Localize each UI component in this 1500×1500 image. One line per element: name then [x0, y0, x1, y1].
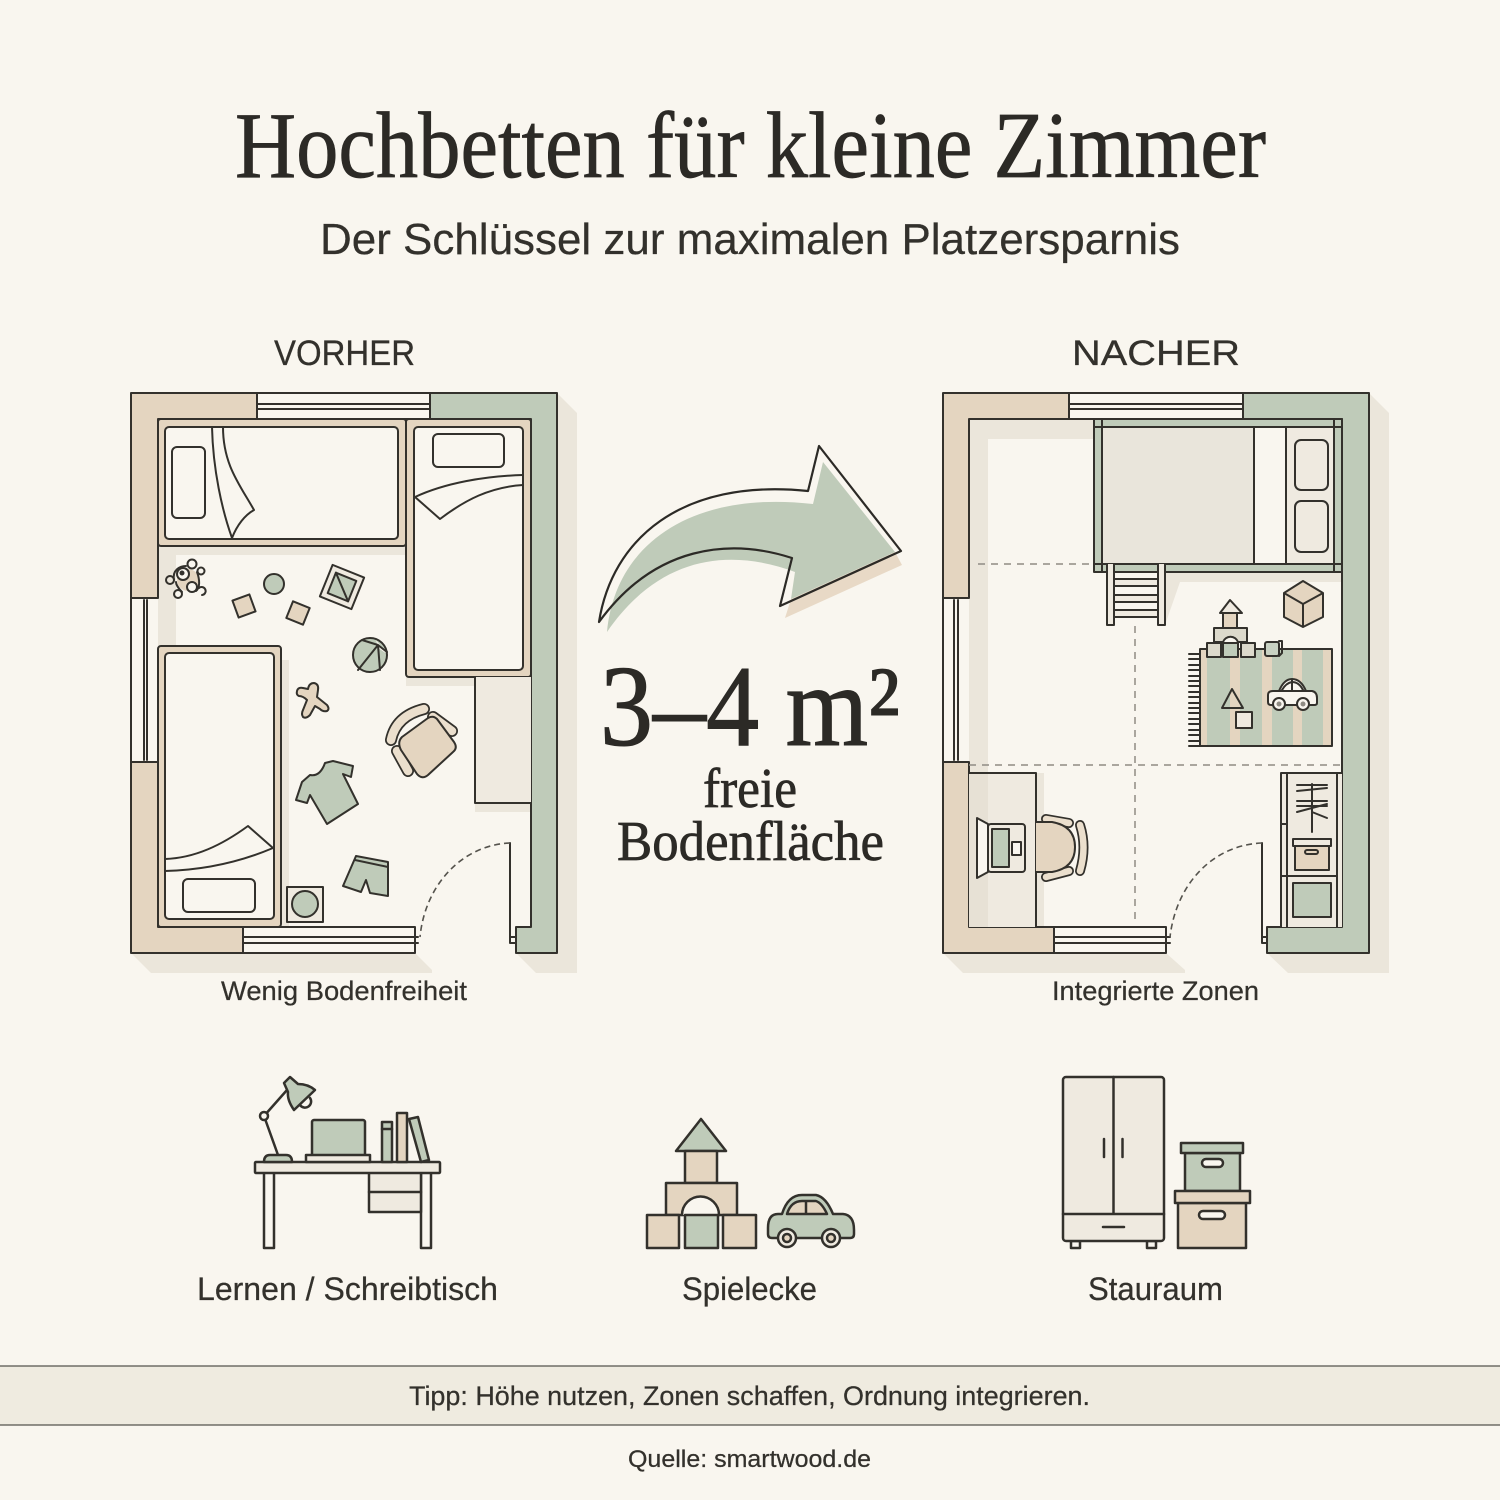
door [420, 843, 516, 943]
label: storage: Stauraum [1088, 1271, 1223, 1307]
icon: wardrobe and boxes [1063, 1077, 1250, 1248]
clothing: shorts [343, 856, 388, 896]
label: study: Lernen / Schreibtisch [197, 1271, 498, 1307]
toy: teddy [297, 683, 328, 718]
text: free floor space: Bodenfläche [617, 811, 884, 873]
heading: before: VORHER [274, 334, 415, 373]
boxes [1175, 1143, 1250, 1248]
door [1170, 843, 1267, 943]
window top [257, 393, 430, 419]
icon: desk with lamp [255, 1077, 440, 1248]
caption: after: Integrierte Zonen [1052, 976, 1259, 1006]
clothing: shirt [296, 761, 358, 824]
block castle [1207, 600, 1282, 657]
text: free floor space: freie [703, 758, 797, 820]
window top [1069, 393, 1243, 419]
big number: 3–4 m² [600, 643, 900, 770]
desk [475, 677, 531, 803]
bed left [158, 646, 281, 927]
toy car [768, 1195, 854, 1247]
bed right [406, 419, 531, 677]
toy: blocks and ball [232, 565, 387, 672]
walls [943, 393, 1369, 953]
wooden cube [1284, 581, 1323, 627]
rug shapes [1222, 689, 1243, 708]
rug [1189, 649, 1332, 746]
label: play corner: Spielecke [682, 1271, 817, 1307]
laptop [306, 1120, 370, 1162]
walls [131, 393, 557, 953]
text: free floor space [617, 758, 884, 873]
title: Hochbetten für kleine Zimmer [235, 94, 1266, 198]
chair [391, 709, 456, 777]
toy box [287, 887, 323, 922]
subtitle: Der Schlüssel zur maximalen Platzersparnis [320, 215, 1180, 264]
loft bed [1094, 419, 1342, 572]
rug car [1268, 679, 1317, 710]
window left [943, 598, 958, 762]
bed top [158, 419, 406, 546]
chair [1036, 819, 1084, 877]
ladder [1107, 564, 1165, 625]
heading: after: NACHER [1072, 334, 1240, 373]
zone dashed lines [969, 564, 1342, 925]
window left [131, 598, 147, 762]
source: Quelle: smartwood.de [628, 1446, 871, 1473]
desk [969, 773, 1036, 927]
panel: floor plan after [943, 393, 1389, 973]
toy: bug [166, 560, 206, 598]
window bottom [243, 927, 418, 953]
lamp [260, 1077, 315, 1162]
tip band: Tipp: Höhe nutzen, Zonen schaffen, Ordnung integrieren. [409, 1381, 1090, 1411]
arrow [599, 446, 902, 632]
panel: floor plan before [131, 393, 577, 973]
storage shelf [1281, 773, 1342, 927]
caption: before: Wenig Bodenfreiheit [221, 976, 467, 1006]
books [382, 1113, 429, 1162]
icon: blocks and toy car [647, 1119, 854, 1248]
tip band [0, 1366, 1500, 1425]
window bottom [1054, 927, 1170, 953]
